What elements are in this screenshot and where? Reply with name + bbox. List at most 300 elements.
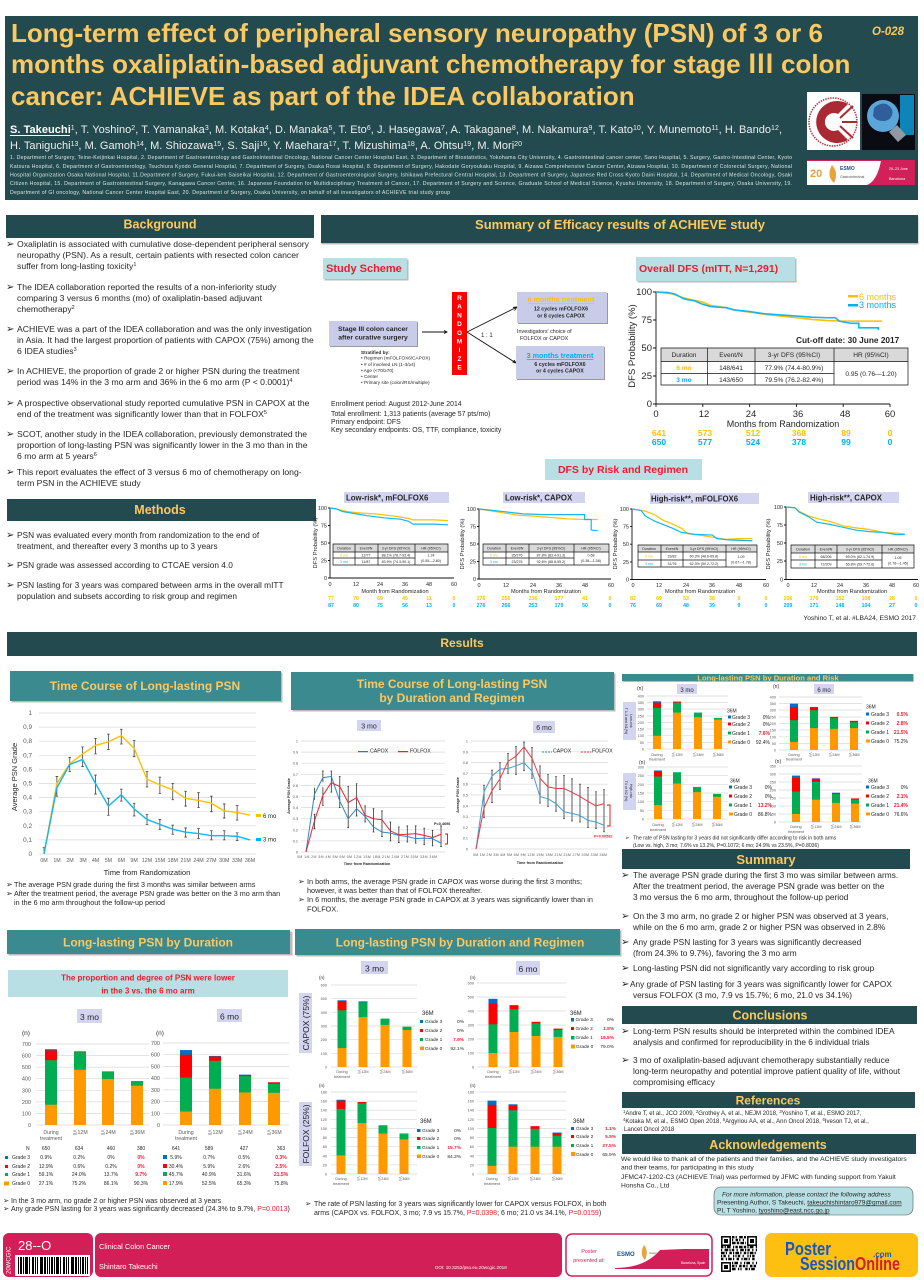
bar chart: FOLFOX 6 mo: ≦36M: [551, 1176, 563, 1181]
text block: risk note: [625, 836, 837, 849]
bar chart: FOLFOX 3 mo: 20: [323, 1163, 327, 1167]
chart: low-risk mFOLFOX6: 77: [328, 596, 334, 602]
table: overall DFS hazard ratio: [661, 348, 908, 385]
bar chart: 6 mo by duration: 700: [151, 1041, 160, 1047]
numbers at risk: overall DFS: 99: [841, 437, 851, 447]
heading: time course by duration and regimen: [291, 672, 616, 712]
bar chart: low risk 6 mo: 100: [770, 735, 776, 739]
callout: contact information: Presenting Author, S Takeuchi, takeuchishintaro979@gmail.com: [717, 1200, 902, 1206]
box: 3 months treatment: 3 months treatment: [527, 351, 594, 360]
bar chart: FOLFOX 3 mo: Grade 1: [422, 1145, 440, 1151]
text block: background bullets: ACHIEVE was a part of the IDEA collaboration and was the only investigation: [17, 324, 312, 334]
bar chart: CAPOX 3 mo: 7.9%: [453, 1037, 465, 1043]
text block: regimen bullets: arms (CAPOX vs. FOLFOX, 3 mo; 7.9 vs 15.7%, P=0.0398; 6 mo; 21.0 vs 34.1%, P=0.0159): [314, 1210, 601, 1217]
numbers at risk: overall DFS: 573: [698, 428, 712, 438]
text: investigators choice: [517, 329, 572, 342]
line chart: average PSN grade: 0,3: [23, 809, 32, 816]
bar chart: CAPOX 3 mo: 0%: [457, 1019, 465, 1025]
bar chart: high risk 3 mo: (n): [639, 760, 645, 766]
bar chart: low risk 3 mo: 400: [638, 694, 644, 698]
bar chart: FOLFOX 3 mo: During: [335, 1177, 347, 1181]
line chart: 3 mo by regimen: 0.4: [293, 806, 298, 810]
table: grade percentages 3 mo: 24.0%: [72, 1172, 87, 1178]
footer: session information: DOI: 10.3252/pso.eu.20wcgic.2018: [435, 1265, 507, 1270]
bar chart: high risk 6 mo: treatment: [788, 830, 805, 834]
heading: conclusions: Conclusions: [732, 1008, 808, 1022]
text block: time course regimen bullets: FOLFOX.: [307, 904, 338, 914]
panel: summary of efficacy results: [313, 215, 919, 622]
bar chart: FOLFOX 3 mo: 36M: [420, 1119, 432, 1125]
logo: congress banner: [807, 160, 915, 185]
chart: high-risk CAPOX: 100: [774, 505, 783, 511]
chart: high-risk mFOLFOX6: 48: [683, 603, 689, 609]
callout: contact information: For more information, please contact the following address: [722, 1192, 891, 1198]
bar chart: CAPOX 3 mo: treatment: [334, 1075, 351, 1079]
box: eligibility: after curative surgery: [338, 334, 408, 342]
bar chart: 3 mo by duration: 100: [22, 1111, 31, 1117]
bar chart: CAPOX 6 mo: 19.5%: [600, 1035, 615, 1041]
chart: high-risk mFOLFOX6: 0: [631, 583, 635, 589]
text block: background bullets: ➢: [6, 467, 14, 478]
chart: high-risk mFOLFOX6: 60.3% (48.6-69.8): [690, 554, 718, 558]
text: ratio: 1 : 1: [481, 333, 493, 339]
bar chart: 6 mo by duration: 600: [151, 1053, 160, 1059]
heading: methods: [7, 499, 316, 521]
bar chart: low risk 3 mo: treatment: [649, 758, 666, 762]
text block: summary bullets: (from 24.3% to 9.7%), favoring the 3 mo arm: [633, 948, 797, 958]
chart: high-risk mFOLFOX6: 75: [623, 525, 629, 531]
text block: regimen bullets: ➢: [305, 1199, 311, 1208]
table: grade percentages 6 mo: 75.8%: [274, 1181, 289, 1187]
bar chart: CAPOX 3 mo: 92.1%: [450, 1046, 465, 1052]
logo: congress banner: Gastrointestinal: [840, 175, 865, 179]
line chart: average PSN grade: Average PSN Grade: [10, 743, 19, 811]
callout: contact information: PI, T Yoshino, tyoshino@east.ncc.go.jp: [717, 1208, 830, 1214]
box: eligibility: Stage III colon cancer: [338, 326, 408, 333]
label: 6 mo: 6 mo: [519, 964, 538, 974]
chart: low-risk mFOLFOX6: Event/N: [360, 546, 373, 550]
text: stratification factors: • Regimen (mFOLFOX6/CAPOX): [361, 356, 431, 360]
numbers at risk: overall DFS: 650: [652, 437, 666, 447]
footer: poster presented at: [566, 1234, 712, 1276]
table: grade percentages 3 mo: 0%: [137, 1164, 145, 1170]
chart: low-risk mFOLFOX6: 75: [321, 524, 327, 530]
line chart: 6 mo by regimen: 1: [466, 740, 468, 744]
chart: low-risk CAPOX: 24: [530, 583, 536, 589]
chart: high-risk CAPOX: 0: [780, 578, 783, 584]
text block: acknowledgements: We would like to thank all of the patients and their families, and the ACHIEVE study investigators: [621, 1156, 907, 1163]
table: grade percentages 6 mo: 45.7%: [169, 1172, 184, 1178]
table: overall DFS hazard ratio: 148/641: [719, 365, 743, 372]
callout: proportion statement: [8, 970, 288, 997]
bar chart: high risk 3 mo: Grade 2: [734, 794, 752, 800]
bar chart: CAPOX 6 mo: 100: [468, 1052, 474, 1056]
bar chart: low risk 3 mo: 200: [638, 721, 644, 725]
text block: background bullets: ➢: [6, 324, 14, 335]
side label: FOLFOX: FOLFOX (25%): [301, 1104, 311, 1164]
chart: high-risk CAPOX: DFS Probability (%): [766, 518, 772, 569]
bar chart: FOLFOX 3 mo: 0%: [454, 1128, 462, 1134]
chart: low-risk CAPOX: 0: [473, 577, 476, 583]
bar chart: 6 mo by duration: 100: [151, 1111, 160, 1117]
chart: high-risk mFOLFOX6: 69: [656, 603, 662, 609]
table: grade percentages 3 mo: 86.1%: [104, 1181, 119, 1187]
chart: low-risk CAPOX: 48: [582, 583, 588, 589]
chart: overall DFS curves: 0: [653, 409, 659, 420]
bar chart: 3 mo by duration: 400: [22, 1077, 31, 1083]
bar chart: low risk 6 mo: 50: [772, 742, 776, 746]
bar: randomize: A: [457, 304, 462, 311]
line chart: average PSN grade: 0M: [40, 858, 48, 864]
bar chart: FOLFOX 3 mo: ≦12M: [356, 1176, 368, 1181]
chart: high-risk mFOLFOX6: 9: [738, 603, 741, 609]
table: grade percentages 3 mo: 75.2%: [72, 1181, 87, 1187]
bar chart: CAPOX 3 mo: (n): [319, 975, 325, 980]
table: grade percentages 3 mo: 650: [42, 1146, 50, 1152]
chart: low-risk CAPOX: 50: [470, 542, 476, 548]
heading: results: [7, 632, 917, 656]
text block: background bullets: chemotherapy2: [17, 304, 75, 314]
chart: high-risk mFOLFOX6: Duration: [642, 547, 656, 551]
bar chart: high risk 6 mo: During: [790, 825, 802, 829]
bar chart: 6 mo by duration: 0: [157, 1123, 160, 1129]
text block: time course bullets: in the 6 mo arm throughout the follow-up period: [14, 898, 165, 907]
bar chart: low risk 3 mo: ≦24M: [692, 752, 704, 757]
text block: summary bullets: Any grade of PSN lasting for 3 years was significantly lower for CAPOX: [630, 979, 892, 989]
chart: high-risk CAPOX: (0.76—1.45): [888, 562, 908, 566]
footer: PosterSessionOnline logo: Online: [855, 1254, 900, 1274]
table: grade percentages 3 mo: [4, 1146, 149, 1187]
box: 6 months treatment: 6 months treatment: [528, 295, 595, 304]
label: 6 mo: 6 mo: [536, 725, 552, 732]
bar chart: low risk 6 mo: Grade 0: [871, 739, 889, 745]
chart: overall DFS curves: 25: [641, 371, 652, 382]
bar chart: 3 mo by duration: 0: [28, 1123, 31, 1129]
chart: low-risk mFOLFOX6: 75: [377, 603, 383, 609]
line chart: 6 mo by regimen: P=0.00582: [594, 834, 612, 838]
line chart: 6 mo by regimen: [456, 740, 613, 865]
chart: high-risk CAPOX: 60: [913, 583, 919, 589]
bar chart: low risk 6 mo: 150: [770, 728, 776, 732]
bar chart: CAPOX 3 mo: ≦12M: [357, 1069, 369, 1074]
chart: overall DFS curves: DFS Probability (%): [627, 304, 638, 388]
label: 6 mo: [516, 961, 540, 975]
chart: high-risk mFOLFOX6: 25: [623, 560, 629, 566]
title: months oxaliplatin-based adjuvant chemotherapy for stage Ⅲ colon: [11, 44, 850, 81]
table: grade percentages 6 mo: 0.5%: [238, 1155, 250, 1161]
chart: low-risk CAPOX: 0: [477, 583, 481, 589]
chart: high-risk mFOLFOX6: 39: [709, 603, 715, 609]
text block: conclusions bullets: ➢: [621, 1026, 629, 1037]
bar chart: high risk 6 mo: [770, 759, 909, 834]
line chart: 3 mo by regimen: 0.8: [293, 762, 298, 766]
callout: contact information: [714, 1187, 913, 1215]
bar chart: CAPOX 6 mo: Grade 2: [576, 1026, 593, 1032]
bar chart: high risk 3 mo: 50: [640, 809, 644, 813]
text block: background bullets: A prospective observational study reported cumulative PSN in CAPOX at the: [17, 398, 310, 408]
bar chart: CAPOX 3 mo: Grade 0: [425, 1046, 443, 1052]
text block: background bullets: 6 IDEA studies3: [17, 346, 77, 356]
bar chart: CAPOX 3 mo: 300: [321, 1024, 327, 1028]
text block: conclusions bullets: 3 mo of oxaliplatin-based adjuvant chemotherapy substantially reduce: [633, 1055, 890, 1065]
heading: time course: [10, 671, 282, 702]
text: stratification factors: Stratified by:: [361, 350, 390, 355]
chart: low-risk mFOLFOX6: 12/77: [362, 554, 370, 558]
bar chart: high risk 6 mo: 250: [770, 780, 776, 784]
line chart: 3 mo by regimen: 0.5: [293, 795, 298, 799]
text block: conclusions bullets: [621, 1026, 901, 1087]
bar chart: low risk 3 mo: ≦12M: [671, 752, 683, 757]
chart: high-risk CAPOX: 209: [784, 603, 792, 609]
bar chart: 3 mo by duration: ≦12M: [72, 1128, 88, 1136]
text block: time course bullets: ➢: [6, 880, 13, 889]
bar chart: high risk 6 mo: 76.6%: [894, 812, 909, 818]
chart: low-risk CAPOX: 179: [555, 603, 563, 609]
text block: acknowledgements: [621, 1156, 907, 1190]
footer: poster presented at: Gastrointestinal: [649, 1251, 670, 1255]
chart: low-risk mFOLFOX6: (0.55—2.80): [421, 559, 441, 563]
bar chart: FOLFOX 6 mo: 180: [468, 1090, 474, 1094]
line chart: 3 mo by regimen: 0.2: [293, 828, 298, 832]
chart: high-risk CAPOX: 176: [810, 596, 818, 602]
line chart: average PSN grade: [10, 710, 277, 877]
chart: overall DFS curves: 24: [746, 409, 756, 420]
chart: high-risk CAPOX: [766, 492, 919, 609]
text block: methods bullets: ➢: [6, 560, 14, 571]
text block: duration bullets: ➢: [3, 1204, 9, 1213]
label: 3 mo: 3 mo: [680, 688, 694, 694]
table: overall DFS hazard ratio: 0.95 (0.76—1.20): [845, 371, 897, 378]
text block: time course regimen bullets: however, it was better than that of FOLFOX thereafter.: [307, 886, 482, 895]
bar chart: low risk 3 mo: 50: [640, 741, 644, 745]
bar chart: low risk 3 mo: Grade 0: [732, 740, 750, 746]
text block: conclusions bullets: Long-term PSN results should be interpreted within the combined IDEA: [633, 1026, 895, 1036]
text block: time course bullets: ➢: [6, 889, 13, 898]
table: grade percentages 6 mo: 17.9%: [169, 1181, 184, 1187]
bar chart: FOLFOX 3 mo: 160: [321, 1100, 327, 1104]
authors: S. Takeuchi1, T. Yoshino2, T. Yamanaka3, M. Kotaka4, D. Manaka5, T. Eto6, J. Hasegawa7, A. Takagane8, M. Nakamura9, T. Kato10, Y. Munemoto11, H. Bando12,: [10, 124, 782, 136]
bar chart: 3 mo by duration: treatment: [40, 1136, 63, 1142]
bar chart: high risk 3 mo: 150: [638, 792, 644, 796]
heading: summary: [622, 849, 910, 869]
side label: CAPOX: CAPOX (75%): [301, 995, 311, 1050]
text block: time course regimen bullets: ➢: [298, 895, 305, 904]
text block: background bullets: 6 mo arm at 5 years6: [17, 451, 97, 461]
bar chart: CAPOX 6 mo: (n): [470, 975, 476, 980]
chart: high-risk CAPOX: 171: [810, 603, 818, 609]
callout: proportion statement: in the 3 vs. the 6 mo arm: [101, 986, 195, 996]
text block: background bullets: suffer from long-lasting toxicity1: [17, 261, 136, 271]
bar chart: low risk 3 mo: During: [651, 753, 663, 757]
footer: session information: Clinical Colon Cancer: [99, 1242, 171, 1251]
table: grade percentages 3 mo: 9.7%: [135, 1172, 147, 1178]
footer: PosterSessionOnline logo: [765, 1233, 918, 1277]
chart: low-risk mFOLFOX6: 3-yr DFS (95%CI): [382, 546, 410, 550]
chart: high-risk mFOLFOX6: 6 mo: [645, 554, 653, 558]
panel: methods: [6, 499, 316, 601]
box: 3 months treatment: [516, 346, 605, 380]
chart: high-risk CAPOX: 25: [777, 559, 783, 565]
bar chart: low risk 6 mo: [770, 684, 909, 762]
line chart: 3 mo by regimen: Average PSN Grade: [287, 778, 291, 814]
chart: low-risk CAPOX: 12: [503, 583, 509, 589]
text: enrollment details: Primary endpoint: DFS: [331, 419, 401, 426]
table: overall DFS hazard ratio: 77.9% (74.4-80.9%): [765, 365, 823, 372]
bar chart: FOLFOX 6 mo: [468, 1083, 617, 1186]
label: overall DFS: Overall DFS (mITT, N=1,291): [639, 263, 778, 275]
side label: low risk: [623, 702, 636, 740]
bar chart: low risk 3 mo: 36M: [727, 708, 737, 714]
panel: references: [622, 1092, 915, 1133]
bar chart: high risk 6 mo: 200: [770, 788, 776, 792]
chart: low-risk CAPOX: 0: [609, 603, 612, 609]
bar chart: 6 mo by duration: During: [178, 1130, 194, 1136]
line chart: 3 mo by regimen: 1: [296, 740, 298, 744]
line chart: average PSN grade: 3 mo: [263, 838, 277, 844]
table: grade percentages 3 mo: 0%: [137, 1155, 145, 1161]
text block: conclusions bullets: compromising efficacy: [633, 1077, 716, 1087]
chart: low-risk CAPOX: 75: [470, 524, 476, 530]
label: 3 mo: [357, 720, 381, 731]
footer: session information: [95, 1233, 562, 1277]
label: 6 mo: 6 mo: [220, 1012, 239, 1022]
bar chart: high risk 3 mo: 300: [638, 766, 644, 770]
bar: randomize: [452, 292, 467, 375]
text block: background bullets: proportion of long-lasting PSN was significantly lower in the 3 mo than in the: [17, 440, 308, 450]
chart: low-risk mFOLFOX6: 83.9% (74.3-90.1): [382, 560, 410, 564]
chart: low-risk mFOLFOX6: DFS Probability (%): [313, 517, 319, 568]
heading: background: Background: [124, 218, 196, 232]
table: overall DFS hazard ratio: 3-yr DFS (95%CI): [768, 352, 820, 359]
text: enrollment details: Enrollment period: August 2012-June 2014: [331, 401, 462, 408]
heading: references: References: [736, 1094, 801, 1108]
bar chart: high risk 3 mo: Grade 0: [734, 812, 752, 818]
bar chart: 3 mo by duration: [22, 1030, 149, 1142]
table: grade percentages 6 mo: 0.7%: [203, 1155, 215, 1161]
chart: low-risk mFOLFOX6: 69: [377, 596, 383, 602]
table: grade percentages 3 mo: Grade 3: [12, 1155, 30, 1161]
text block: summary bullets: while on the 6 mo arm, grade 2 or higher PSN was observed in 2.8%: [632, 922, 886, 932]
bar chart: low risk 3 mo: ≦36M: [712, 752, 724, 757]
text block: duration bullets: ➢: [3, 1196, 9, 1205]
bar chart: high risk 6 mo: 2.1%: [897, 794, 909, 800]
table: grade percentages 3 mo: 634: [75, 1146, 83, 1152]
bar chart: CAPOX 3 mo: 0: [325, 1066, 327, 1070]
chart: high-risk CAPOX: 104: [862, 603, 870, 609]
bar chart: CAPOX 3 mo: ≦24M: [379, 1069, 391, 1074]
numbers at risk: overall DFS: [652, 428, 893, 447]
text block: acknowledgements: JFMC47-1202-C3 (ACHIEVE Trial) was performed by JFMC with funding support from Yakult: [621, 1174, 896, 1181]
chart: high-risk CAPOX: 12: [811, 583, 817, 589]
bar chart: CAPOX 6 mo: 400: [468, 1010, 474, 1014]
bar chart: high risk 3 mo: ≦12M: [671, 822, 683, 827]
bar chart: FOLFOX 6 mo: Grade 3: [576, 1126, 594, 1132]
chart: high-risk mFOLFOX6: 0: [765, 596, 768, 602]
box: eligibility: [329, 321, 418, 347]
line chart: average PSN grade: 0: [28, 851, 32, 858]
text block: duration bullets: Any grade PSN lasting for 3 years was significantly decreased (24.3% to 9.7%, P=0.0013): [11, 1206, 290, 1213]
bar chart: FOLFOX 6 mo: Grade 1: [576, 1143, 594, 1149]
bar chart: CAPOX 6 mo: 1.5%: [603, 1026, 615, 1032]
chart: low-risk mFOLFOX6: 87: [328, 603, 334, 609]
bar chart: CAPOX 6 mo: 500: [468, 996, 474, 1000]
bar chart: 3 mo by duration: 700: [22, 1042, 31, 1048]
bar chart: 6 mo by duration: 200: [151, 1100, 160, 1106]
line chart: average PSN grade: 0,8: [23, 738, 32, 745]
logo: light bulb globe: [862, 94, 915, 150]
bar: randomize: D: [457, 321, 462, 328]
bar chart: CAPOX 6 mo: 0%: [607, 1017, 615, 1023]
bar chart: 6 mo by duration: 500: [151, 1064, 160, 1070]
numbers at risk: overall DFS: 0: [888, 437, 893, 447]
text block: summary bullets: ➢: [621, 911, 629, 922]
text block: methods bullets: PSN grade was assessed according to CTCAE version 4.0: [17, 560, 233, 570]
footer: poster id block: [3, 1233, 93, 1277]
text block: time course bullets: After the treatment period, the average PSN grade was better on the 3 mo arm than: [14, 889, 280, 898]
bar chart: FOLFOX 6 mo: ≦12M: [507, 1176, 519, 1181]
text: cut-off date: Cut-off date: 30 June 2017: [796, 335, 900, 345]
heading: duration and risk: [622, 674, 914, 682]
chart: high-risk CAPOX: 148: [836, 603, 844, 609]
chart: low-risk mFOLFOX6: 13: [426, 603, 432, 609]
bar chart: low risk 6 mo: 36M: [866, 704, 876, 710]
bar chart: high risk 3 mo: 250: [638, 774, 644, 778]
table: grade percentages 3 mo: N: [26, 1146, 30, 1152]
text block: time course regimen bullets: In both arms, the average PSN grade in CAPOX was worse during the first 3 months;: [307, 877, 582, 886]
bar chart: low risk 6 mo: 200: [770, 722, 776, 726]
table: grade percentages 3 mo: 0.6%: [73, 1164, 85, 1170]
bar chart: CAPOX 6 mo: During: [487, 1070, 499, 1074]
chart: low-risk CAPOX: 50: [582, 603, 588, 609]
line chart: average PSN grade: 21M: [180, 858, 191, 864]
chart: high-risk mFOLFOX6: 24: [683, 583, 689, 589]
chart: high-risk CAPOX: 108: [862, 596, 870, 602]
line chart: average PSN grade: 0,1: [23, 837, 32, 844]
bar chart: CAPOX 3 mo: ≦36M: [401, 1069, 413, 1074]
text: stratification factors: • # of involved LN (1-3/≥4): [361, 362, 416, 367]
bar chart: FOLFOX 6 mo: 65.9%: [602, 1152, 617, 1158]
heading: time course: Time Course of Long-lasting PSN: [50, 679, 240, 693]
table: grade percentages 3 mo: 0.2%: [73, 1155, 85, 1161]
chart: low-risk mFOLFOX6: 0: [453, 603, 456, 609]
bar chart: high risk 3 mo: 100: [638, 800, 644, 804]
bar chart: high risk 3 mo: [638, 760, 773, 832]
chart: low-risk CAPOX: 35/276: [512, 554, 522, 558]
chart: high-risk mFOLFOX6: 100: [620, 507, 629, 513]
bar chart: high risk 6 mo: ≦36M: [849, 824, 861, 829]
line chart: 6 mo by regimen: 0.6: [463, 783, 468, 787]
table: grade percentages 3 mo: Grade 0: [12, 1181, 30, 1187]
text block: summary bullets: 3 mo versus the 6 mo arm, throughout the follow-up period: [633, 892, 849, 902]
chart: overall DFS curves: 36: [793, 409, 803, 420]
bar chart: 3 mo by duration: (n): [22, 1030, 30, 1037]
bar chart: CAPOX 3 mo: 100: [321, 1052, 327, 1056]
bar chart: low risk 3 mo: 92.4%: [756, 740, 771, 746]
chart: low-risk mFOLFOX6: 0: [324, 576, 327, 582]
table: grade percentages 3 mo: 460: [107, 1146, 115, 1152]
panel: background: [6, 215, 314, 488]
bar chart: CAPOX 3 mo: 36M: [422, 1011, 434, 1017]
bar chart: FOLFOX 3 mo: 0%: [454, 1136, 462, 1142]
footer: poster presented at: Barcelona, Spain: [681, 1261, 706, 1265]
line chart: 6 mo by regimen: 0.4: [463, 804, 468, 808]
chart: low-risk CAPOX: Months from Randomization: [511, 589, 581, 595]
chart: high-risk CAPOX: 48: [889, 583, 895, 589]
panel: PSN by duration and risk: [622, 674, 914, 849]
text block: background bullets: SCOT, another study in the IDEA collaboration, previously demonstrated the: [17, 429, 307, 439]
chart: low-risk mFOLFOX6: 3 mo: [340, 560, 348, 564]
line chart: 6 mo by regimen: CAPOX: [553, 748, 572, 754]
